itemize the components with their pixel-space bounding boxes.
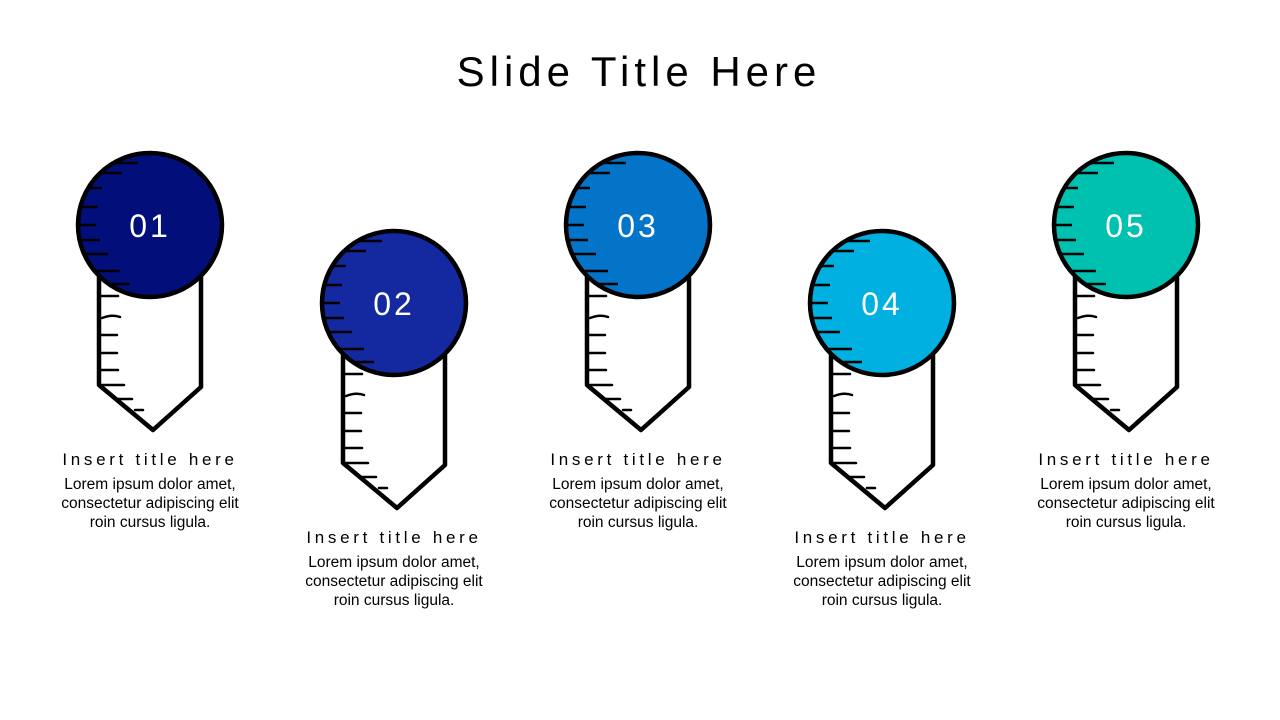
text 03: Lorem ipsum dolor amet, (552, 476, 724, 493)
text 04 (793, 528, 971, 609)
item 03: 03 (617, 208, 659, 244)
text 04: Lorem ipsum dolor amet, (796, 554, 968, 571)
text 02: consectetur adipiscing elit (305, 573, 483, 590)
text 03: consectetur adipiscing elit (549, 495, 727, 512)
circle 01 (78, 153, 222, 297)
circle 02 (322, 231, 466, 375)
item 05: 05 (1105, 208, 1147, 244)
item 04: 04 (861, 286, 903, 322)
item 02: 02 (373, 286, 415, 322)
title: Slide Title Here (457, 48, 821, 95)
text 05: consectetur adipiscing elit (1037, 495, 1215, 512)
text 01: Insert title here (62, 450, 238, 469)
text 03: Insert title here (550, 450, 726, 469)
item 03 (549, 153, 727, 531)
item 02 (305, 231, 483, 609)
text 05 (1037, 450, 1215, 531)
circle 04 (810, 231, 954, 375)
text 03: roin cursus ligula. (578, 514, 698, 531)
text 01: consectetur adipiscing elit (61, 495, 239, 512)
text 05: Lorem ipsum dolor amet, (1040, 476, 1212, 493)
item 05 (1037, 153, 1215, 531)
text 05: Insert title here (1038, 450, 1214, 469)
text 03 (549, 450, 727, 531)
text 05: roin cursus ligula. (1066, 514, 1186, 531)
text 01: roin cursus ligula. (90, 514, 210, 531)
text 02: Lorem ipsum dolor amet, (308, 554, 480, 571)
text 01: Lorem ipsum dolor amet, (64, 476, 236, 493)
circle 03 (566, 153, 710, 297)
text 01 (61, 450, 239, 531)
item 01 (61, 153, 239, 531)
text 02: Insert title here (306, 528, 482, 547)
text 02 (305, 528, 483, 609)
circle 05 (1054, 153, 1198, 297)
text 02: roin cursus ligula. (334, 592, 454, 609)
text 04: consectetur adipiscing elit (793, 573, 971, 590)
item 01: 01 (129, 208, 171, 244)
text 04: roin cursus ligula. (822, 592, 942, 609)
text 04: Insert title here (794, 528, 970, 547)
item 04 (793, 231, 971, 609)
